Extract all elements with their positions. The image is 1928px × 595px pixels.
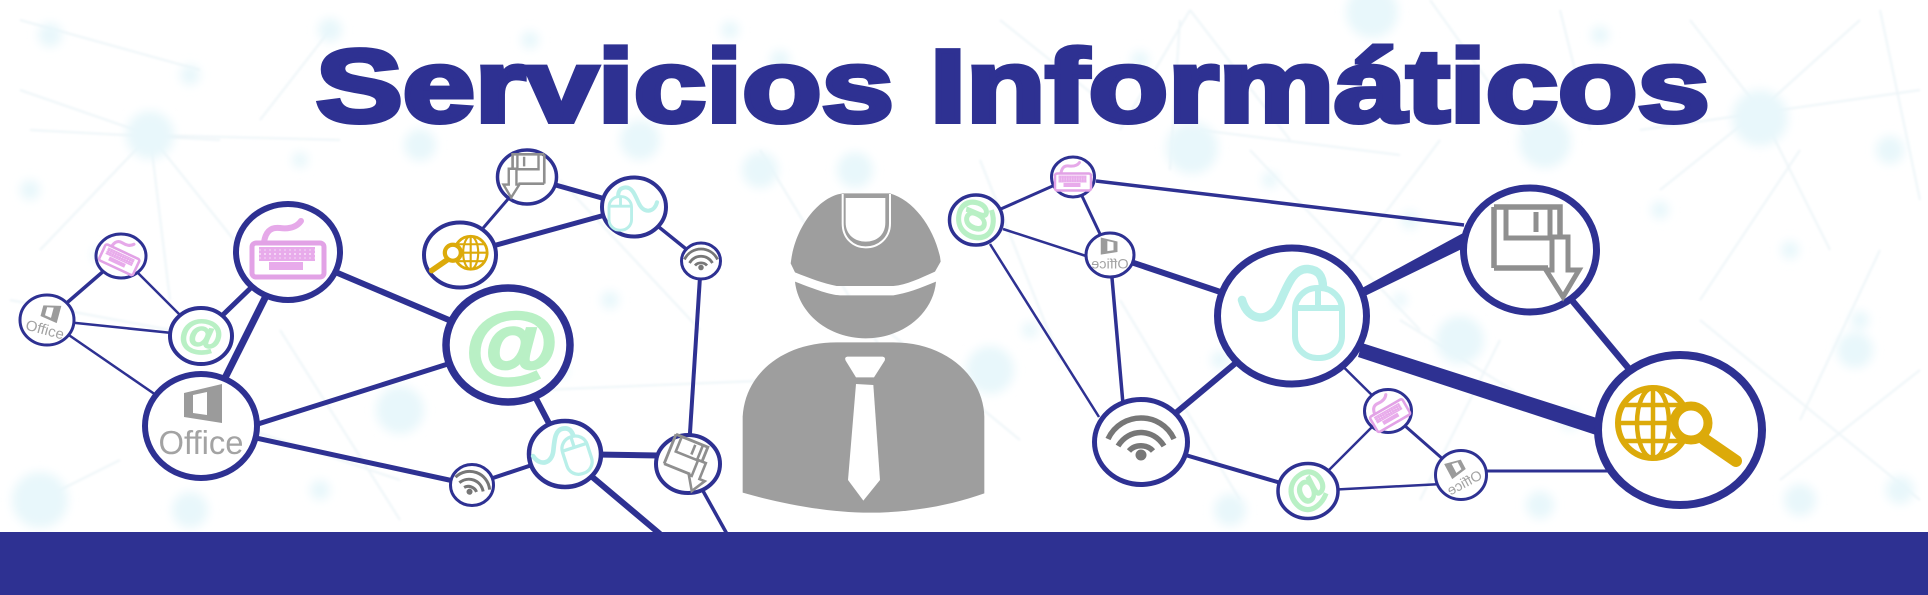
node: at sign small: @ [1274, 457, 1339, 522]
torso [743, 342, 984, 513]
left network diagram [20, 150, 727, 534]
node: keyboard small [1364, 389, 1412, 433]
hard hat [791, 193, 941, 286]
thick link mouse to floppy [1362, 232, 1470, 296]
node: mouse top [602, 178, 666, 236]
helmet ridge [843, 194, 890, 247]
thick link mouse to globe [1358, 343, 1600, 435]
title: Servicios Informáticos [316, 29, 1710, 143]
node: keyboard small [96, 233, 146, 278]
right network diagram [946, 157, 1762, 522]
node: wifi small top [682, 243, 720, 279]
node: office large: Office [158, 424, 244, 461]
left network links [47, 177, 727, 534]
node: office small: Office [1444, 467, 1485, 498]
face [795, 282, 936, 338]
node: floppy bottom [656, 434, 720, 494]
node: mouse large [1218, 248, 1366, 384]
node: at sign large: @ [466, 296, 558, 390]
node: office top [1086, 233, 1134, 277]
node: globe search small [424, 222, 496, 288]
icon: worker with hard hat and tie [743, 193, 984, 513]
node: office small: Office [24, 318, 66, 343]
tie [848, 384, 880, 501]
node: floppy large [1464, 188, 1596, 312]
node: office top: Office [1091, 255, 1129, 271]
node: at sign top: @ [946, 194, 1001, 245]
tie knot [845, 357, 885, 377]
node: mouse bottom [528, 421, 601, 487]
helmet ridge inner [846, 198, 885, 242]
node: office small [1436, 450, 1486, 500]
node: keyboard top [1052, 157, 1094, 197]
node: office small [20, 295, 74, 345]
node: at sign small: @ [177, 309, 226, 360]
node: wifi small bottom [450, 464, 494, 506]
node: wifi large [1094, 400, 1188, 484]
node: globe search large [1598, 355, 1762, 505]
node: office large [145, 374, 257, 478]
right network links [976, 177, 1680, 491]
bottom band [0, 532, 1928, 595]
node: at sign large [446, 288, 570, 402]
node: floppy small [498, 150, 556, 204]
node: keyboard large [236, 204, 340, 300]
